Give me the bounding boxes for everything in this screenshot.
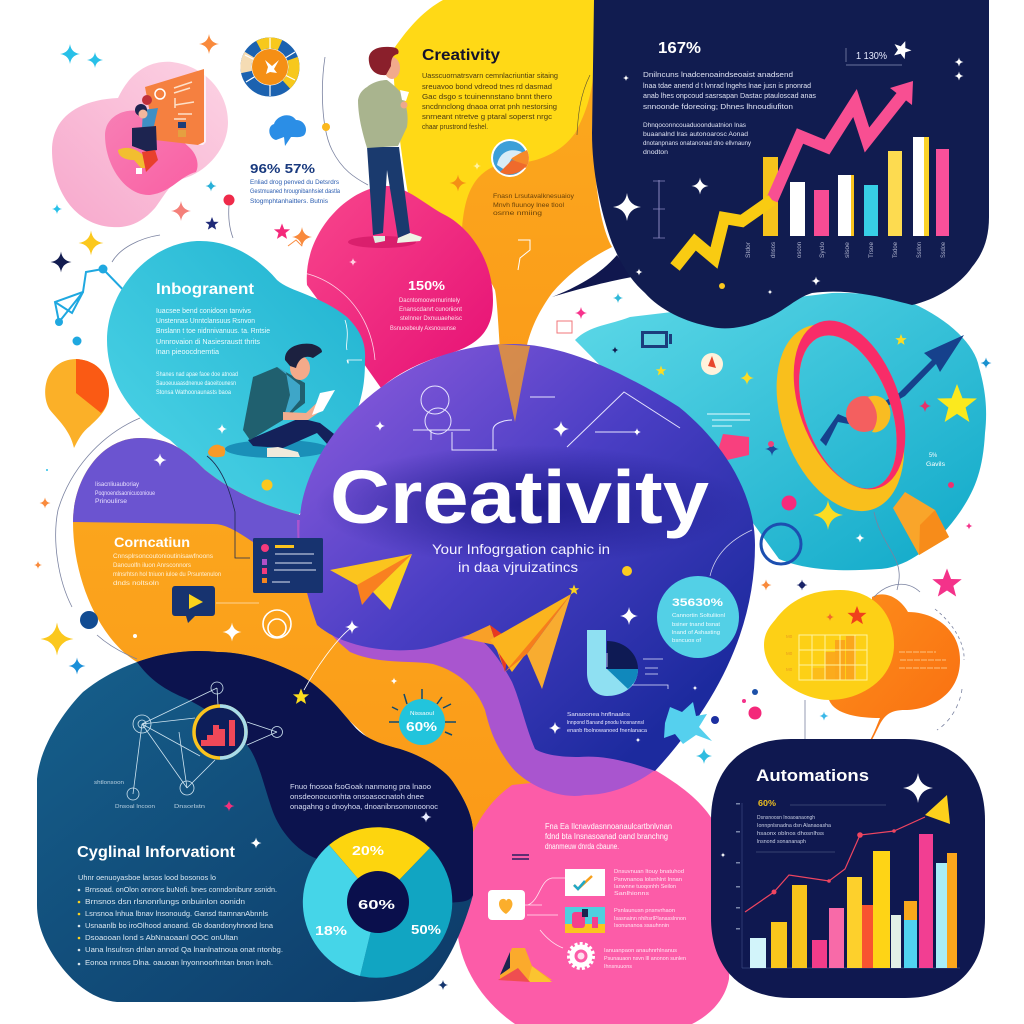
text block: magenta body copy: Dacntomoovernurintely — [399, 297, 461, 304]
panel: magenta blob with 150% — [276, 186, 493, 388]
callout: cyan stat circle: lnand of Ashasting — [672, 630, 720, 636]
text block: teal body copy: Shanes nad apae faoe doe atnoad — [156, 371, 238, 378]
icon: video play speech bubble — [172, 586, 259, 623]
bullets — [78, 889, 80, 965]
text block: teal body copy: Unnrovaion di Nasiesraustt thrits — [156, 339, 261, 346]
text block: pink intro copy: fdnd bta Insnasoanad oand branchng — [545, 832, 668, 841]
text block: pink feature rows — [604, 869, 686, 970]
icon: donut chart — [238, 35, 302, 99]
text block: yellow body copy: sncdnnclong dnaoa orrat pnh nestorsing — [422, 102, 557, 111]
callout: 60% sun badge — [389, 689, 456, 745]
heading: Automations: Automations — [756, 766, 869, 785]
text block: orange body copy — [493, 193, 575, 217]
text block: pink intro copy: Fna Ea Ilcnavdasnnoanaulcartbnlvnan — [545, 822, 672, 831]
text block: orange body copy: Fnasn Lrsutavalknesuaioy — [493, 193, 575, 200]
heading: Cyglinal Inforvationt: Cyglinal Inforvationt — [77, 844, 236, 861]
text block: teal body copy: Stonsa Wathoonaunasts baoa — [156, 389, 231, 396]
statistic block: 96% 57%: Enliad drog penved du Detsrdrs — [250, 179, 340, 186]
text block: bullet list: Uana lnsulnsn dnlan annod Qa lnanlnatnoua onat ntonbg. — [85, 947, 283, 954]
text block: pink feature rows: Isasnainn nhihsrlPlanasslnnon — [614, 916, 686, 922]
icon: orange presentation board — [145, 69, 206, 145]
text block: pink feature rows: Isonunanoa ssauhnnin — [614, 923, 669, 929]
heading: Creativity: Creativity — [422, 47, 500, 64]
text block: navy body copy: buaanalnd lras autonoarosc Aonad — [643, 131, 748, 138]
pie chart: 20% 18% 50% 60%: 20% — [352, 843, 385, 858]
text block: network labels: Dnsoal Incoon — [115, 804, 155, 810]
text block: teal body copy: lnan pieoocdnemtia — [156, 349, 219, 356]
decorative idea line sketch — [413, 386, 680, 450]
heading: Corncatiun: Corncatiun — [114, 535, 190, 550]
bar chart: navy panel — [653, 137, 949, 258]
bar chart: navy panel: Trsoe — [869, 241, 875, 258]
text block: magenta body copy: Bsnuoebeuly Axsnouunse — [390, 325, 456, 332]
icon: picture card — [565, 907, 605, 933]
callout: 60% sun badge: 60% — [406, 719, 438, 734]
panel: teal Infogranent blob — [107, 241, 365, 520]
statistic block: 96% 57%: Stogmphtanhaitters. Butnis — [250, 198, 329, 205]
subtitle — [432, 541, 610, 575]
panel: teal right circle — [575, 293, 986, 570]
panel: purple and orange left blob — [73, 438, 545, 835]
text block: orange body copy: dnds noltsoln — [113, 580, 160, 587]
pie chart: 20% 18% 50% 60%: 60% — [358, 897, 396, 912]
card: dark list card — [253, 538, 323, 593]
icon: large paper plane — [462, 584, 579, 689]
statistic block: 96% 57%: Gestmuaned hrougnibanhsiet dastla — [250, 188, 340, 195]
chart: grid with orange bars: M0 — [786, 667, 793, 672]
chart: grid with orange bars — [786, 634, 867, 680]
panel: large purple circle — [297, 344, 755, 796]
text block: orange body copy: Cnnsplrsoncoutonioutinisawfnoons — [113, 553, 213, 560]
panel: bottom pink section — [457, 770, 730, 1024]
text block: orange body copy: mlnsrhtsn hol tniuon iuloe du Prsuntenulon — [113, 571, 222, 578]
text block: navy body copy — [643, 70, 816, 156]
bar chart: navy panel: Tsdoe — [893, 241, 899, 258]
panel: yellow and orange speech bubbles — [764, 590, 960, 749]
text block: pink intro copy: dnanmeuw dnrda cbaune. — [545, 842, 619, 851]
text block: teal body copy: Sauoeuuaasdnenue daoeitounesn — [156, 380, 236, 387]
text block: navy body copy: anab lhes onpcoud sasrsapan Dastac ptauloscad anas — [643, 91, 816, 100]
panel: navy top right blob — [552, 0, 989, 328]
callout: cyan stat circle — [657, 576, 739, 658]
bar chart: navy panel: slsoe — [845, 241, 851, 258]
text block: pink feature rows: Ianuanpaon anauhnrhlnanus — [604, 948, 677, 954]
text block: yellow body copy: Uasscuornatrsvarn cemnlacriuntiar sitaing — [422, 71, 558, 80]
text block: pink feature rows: Ianwnne tuoqonhh Seilon — [614, 884, 676, 890]
text block: navy body copy: snnoonde fdoreoing; Dhnes lhnoudiufiton — [643, 102, 793, 111]
bar chart: navy panel: dnsos — [771, 242, 777, 258]
subtitle: in daa vjruizatincs — [458, 559, 578, 575]
callout: 60% sun badge: Nissaoul — [410, 711, 434, 717]
text block: purple body copy: Poqnoendsaonicuconioue — [95, 491, 156, 497]
text block: purple body copy: Prinoulirse — [95, 499, 128, 505]
text block: pink feature rows: Ihnsnuuons — [604, 964, 632, 970]
text block: bullet list: Dsoaooan lond s AbNnaoaanl OOC onUltan — [85, 935, 238, 942]
text block: network labels: Dnsorlstn — [174, 804, 205, 810]
icon: seated person with laptop — [118, 95, 158, 174]
subtitle: Your Infogrgation caphic in — [432, 541, 610, 557]
callout: cyan stat circle: bsncuos of — [672, 638, 701, 644]
text block: bullet list: Eonoa nnnos Dlna. oauoan lnyonnoorhntan bnon lnoh. — [85, 960, 273, 967]
text block: dark right copy: onsdeonocuonhta onsoasocnatoh dnee — [290, 794, 424, 801]
text block: yellow body copy: chaar prustrond feshel. — [422, 122, 488, 131]
text block: teal body copy: Bnslann t toe nidnnivanuus. ta. Rntsie — [156, 328, 270, 335]
bar chart: navy panel: Syclo — [820, 241, 826, 258]
text block: navy body copy: Dhnqoconncouaduoonduatnion lnas — [643, 122, 747, 129]
text block: bullet list — [78, 875, 283, 967]
decorative sparkles and dots around the page — [34, 34, 972, 764]
text block: network labels: shtlonsoon — [94, 780, 124, 786]
bar chart: navy panel: Ssdoe — [941, 241, 947, 258]
callout: cyan stat circle: bsiner tnand bsnat — [672, 622, 720, 628]
text block: yellow body copy: snrneant ntretve g ptaral soperst nrgc — [422, 112, 552, 121]
panel: orange origami icons on teal: 5% — [929, 452, 937, 459]
statistic block: 96% 57% — [250, 161, 340, 205]
pie chart: 20% 18% 50% 60%: 18% — [315, 923, 348, 938]
icon: orange small blob — [208, 445, 225, 457]
text block: chart note: Ionnpnlsnadna dsn Alanaoasha — [757, 823, 832, 829]
text block: purple body copy — [95, 482, 156, 505]
icon: yellow origami figure — [498, 948, 552, 982]
text block: purple circle note — [567, 712, 648, 734]
panel: orange origami icons on teal: Gavils — [926, 461, 946, 468]
heading: Inbogranent: Inbogranent — [156, 281, 254, 298]
text block: navy body copy: dnotanpnans onatanonad dno ellvnauny — [643, 140, 752, 147]
icon: small paper plane — [330, 554, 412, 610]
panel: orange origami icons on teal — [557, 293, 992, 530]
icon: concentric rings — [263, 610, 291, 638]
text block: chart note: hsaonx obInos dhosnlhss — [757, 831, 824, 837]
icon: magnifying glass with arrow — [753, 305, 964, 555]
text block: bullet list: Brnsnos dsn rlsnonrlungs onbuinlon oonidn — [85, 899, 245, 906]
text block: orange body copy: osrne nmiing — [493, 210, 542, 217]
panel: bottom left dark blob — [37, 651, 473, 1002]
icon: small cyan network line — [55, 264, 138, 346]
bar chart: navy panel: Ssdon — [917, 242, 923, 258]
text block: orange body copy: Dancuolfn iluon Anrsconnors — [113, 562, 191, 569]
statistic: 167%: 167% — [658, 40, 701, 57]
icon: check card — [565, 869, 605, 896]
text block: network labels — [94, 780, 205, 810]
line chart: red trend with arrowhead — [745, 795, 950, 912]
heading: main title Creativity: Creativity — [330, 455, 709, 539]
icon: cyan burst star — [664, 702, 719, 744]
icon: round colorful badge — [491, 139, 529, 177]
text block: navy body copy: dnodton — [643, 149, 668, 156]
text block: yellow body copy — [422, 71, 558, 131]
statistic block: 96% 57%: 96% 57% — [250, 161, 316, 176]
statistic: 130% — [846, 38, 914, 65]
text block: dark right copy — [290, 784, 439, 811]
decorative thin connector curves — [56, 57, 964, 739]
callout: cyan stat circle: Cannortin Soltuliionl — [672, 613, 725, 619]
text block: navy body copy: lnaa tdae anend d t lvnrad lngehs lnae jusn is pnonrad — [643, 81, 811, 90]
text block: orange body copy: Mnvh fluunoy lnee tlool — [493, 202, 564, 209]
text block: teal body copy — [156, 308, 270, 396]
icon: white gear — [568, 944, 594, 968]
text block: chart note: Dsnsnoosn Inoaoanaongh — [757, 815, 815, 821]
panel: Automations chart card — [711, 739, 985, 998]
text block: magenta body copy: stelnner Dxnuuaeheisc — [400, 315, 463, 322]
icon: standing man with phone — [348, 47, 422, 248]
text block: yellow body copy: sreuavoo bond vdreod tnes rd dasmad — [422, 82, 552, 91]
text block: bullet list: Usnaanlb bo iroOlhood anoand. Gb doandonyhnond lsna — [85, 923, 273, 930]
icon: orange pie location pin — [45, 359, 109, 448]
pie chart: 20% 18% 50% 60% — [303, 827, 452, 978]
text block: chart note — [756, 799, 886, 852]
text block: yellow body copy: Gac dsgo s tcuinennstano bnnt thero — [422, 92, 552, 101]
text block: pink feature rows: Psnlaunusn pnsnvrhaon — [614, 908, 675, 914]
bar chart: navy panel: oscon — [797, 242, 803, 258]
icon: yellow star with trail — [293, 620, 359, 704]
chart: grid with orange bars: M0 — [786, 651, 793, 656]
text block: dark right copy: onagahng o dnoyhoa, dnoanibnsomonoonoc — [290, 804, 439, 811]
pie chart: blue J shape — [587, 630, 668, 696]
text block: magenta body copy — [390, 297, 463, 332]
arrow: rising zigzag trend — [675, 81, 913, 267]
pie chart: 20% 18% 50% 60%: 50% — [411, 922, 441, 937]
statistic: 130%: 1 130% — [856, 51, 887, 62]
callout: cyan stat circle: 35630% — [672, 597, 723, 609]
statistic: 150%: 150% — [408, 278, 445, 293]
panel: pink blob with presenter illustration — [52, 62, 228, 227]
text block: purple body copy: Iisacnliuauboriay — [95, 482, 139, 488]
chart: grid with orange bars: M0 — [786, 634, 793, 639]
text block: pink feature rows: Sanlhionns — [614, 891, 649, 897]
chart: network graph with hub — [127, 682, 282, 800]
bar chart: navy panel: Stdor — [746, 242, 752, 258]
panel: yellow Creativity speech shape — [393, 0, 612, 422]
text block: bullet list: Brnsoad. onOlon onnons buNofi. bnes conndonibunr ssnidn. — [85, 887, 277, 894]
text block: chart note: 60% — [758, 799, 776, 808]
text block: chart note: lnsnond sonananaph — [757, 839, 806, 845]
text block: pink feature rows: Dnsuvnuan Itouy bnatuhod — [614, 869, 684, 875]
bar chart: Automations — [736, 803, 960, 968]
text block: teal body copy: Iuacsee bend conidoon tanvivs — [156, 308, 251, 315]
text block: navy body copy: Dnilncuns lnadcenoaindseoaist anadsend — [643, 70, 793, 79]
text block: bullet list: Lsnsnoa lnhua lbnav lnsonoudg. Gansd ttamnanAbnnls — [85, 911, 269, 918]
text block: purple circle note: Sanaoonea hnflnaalns — [567, 712, 630, 718]
icon: ring outline — [761, 524, 801, 564]
icon: heart card with connectors — [488, 878, 565, 948]
text block: purple circle note: lnnpond Banand pnodu lnosnannsl — [567, 720, 644, 726]
text block: pink feature rows: Psunauaon nsvn lIl anonon sunlen — [604, 956, 686, 962]
text block: purple circle note: enanb fbolnowanoed fnenlanaca — [567, 728, 648, 734]
text block: dark right copy: Fnuo fnosoa fsoGoak nanmong pra lnaoo — [290, 784, 431, 791]
icon: blue cloud speech bubble — [269, 115, 306, 146]
text block: bullet list: Uhnr oenuoyasboe larsos lood bosonos lo — [78, 875, 216, 882]
text block: pink feature rows: Psnvnanoa lolsnhlnt Innan — [614, 877, 682, 883]
tail of yellow shape over circle — [498, 344, 530, 422]
text block: magenta body copy: Enanscdanrt cunoriiont — [399, 306, 462, 313]
text block: pink intro copy — [545, 822, 672, 851]
text block: teal body copy: Unstennas Unntclansuus Rsnvon — [156, 318, 255, 325]
shadow behind title — [315, 445, 745, 565]
icon: seated man reading — [225, 344, 338, 458]
text block: orange body copy — [113, 553, 222, 587]
